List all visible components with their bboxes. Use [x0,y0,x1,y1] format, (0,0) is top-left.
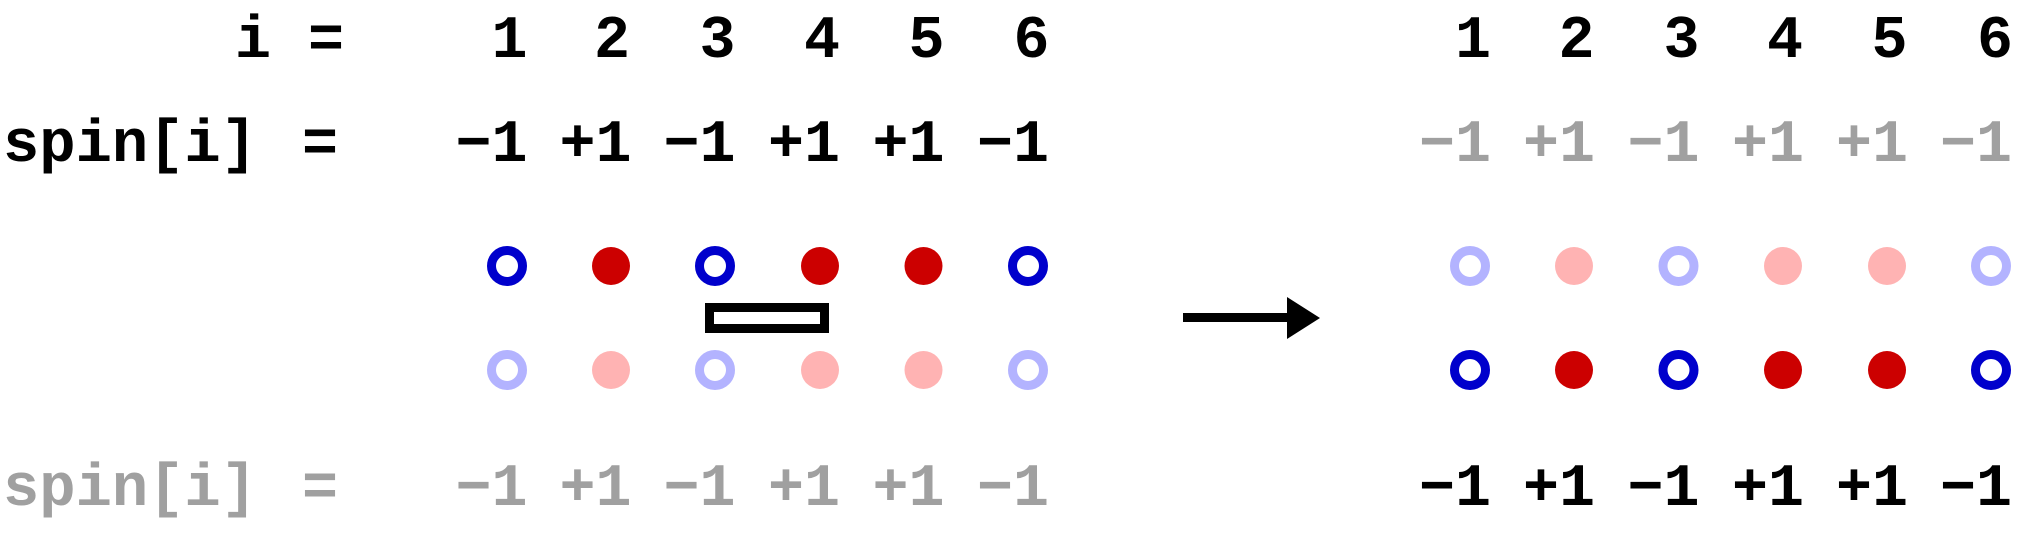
right bottom row spins [1454,351,2006,389]
index numbers right: 6 [1977,8,2013,76]
index numbers left: 3 [699,8,736,76]
row label: i = [235,8,344,76]
row label: spin[i] = top: = [302,112,338,180]
spin values top right (faded) [1419,112,2012,180]
left top row spins [492,247,1044,285]
spin values bottom left (faded): −1 [663,456,736,524]
row label: spin[i] = bottom (faded): = [302,456,338,524]
index numbers left [491,8,1050,76]
index numbers right: 3 [1663,8,1700,76]
spin values top left [455,112,1049,180]
spin values top left: −1 [663,112,736,180]
right top row spins (faded) [1454,247,2006,285]
spin values top right (faded): +1 [1523,112,1595,180]
spin values top left: +1 [872,112,944,180]
spin values top right (faded): −1 [1940,112,2012,180]
spin values top right (faded): −1 [1627,112,1700,180]
index numbers left: 2 [594,8,630,76]
row label: spin[i] = bottom (faded): spin[i] [3,456,257,524]
index numbers right: 2 [1558,8,1595,76]
selection rectangle [710,308,824,328]
spin values bottom right: +1 [1523,456,1595,524]
spin values bottom right: +1 [1732,456,1804,524]
spin values bottom left (faded): +1 [559,456,632,524]
spin values top left: +1 [559,112,632,180]
arrow [1183,297,1320,339]
spin values bottom right: −1 [1419,456,1491,524]
spin values bottom right: −1 [1940,456,2012,524]
left bottom row spins (faded) [492,351,1044,389]
index numbers right: 4 [1767,8,1803,76]
index numbers right: 5 [1871,8,1908,76]
row label: i =: i [235,8,271,76]
row label: spin[i] = top: spin[i] [3,112,257,180]
spin values top right (faded): +1 [1836,112,1908,180]
spin values top right (faded): +1 [1732,112,1804,180]
spin values top right (faded): −1 [1419,112,1491,180]
index numbers left: 4 [804,8,840,76]
index numbers right: 1 [1455,8,1491,76]
index numbers right [1455,8,2013,76]
spin values bottom right: +1 [1836,456,1908,524]
index numbers left: 1 [491,8,528,76]
spin values bottom left (faded) [455,456,1049,524]
spin values bottom left (faded): +1 [872,456,944,524]
spin values bottom left (faded): +1 [768,456,840,524]
spin values bottom right: −1 [1627,456,1700,524]
index numbers left: 6 [1013,8,1050,76]
row label: i =: = [308,8,344,76]
spin values bottom left (faded): −1 [977,456,1049,524]
spin values bottom left (faded): −1 [455,456,528,524]
spin values bottom right [1419,456,2012,524]
spin values top left: −1 [977,112,1049,180]
spin values top left: −1 [455,112,528,180]
index numbers left: 5 [908,8,945,76]
spin values top left: +1 [768,112,840,180]
